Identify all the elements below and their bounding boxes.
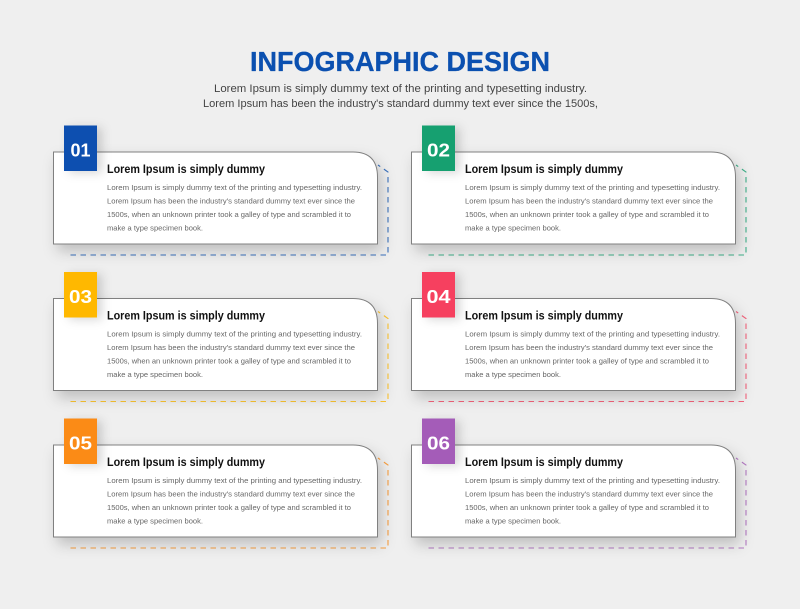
card text 03: make a type specimen book. xyxy=(107,370,203,379)
card text 01 xyxy=(107,183,362,232)
card text 03 xyxy=(107,330,362,379)
card heading 04: Lorem Ipsum is simply dummy xyxy=(465,310,624,322)
card text 05: 1500s, when an unknown printer took a galley of type and scrambled it to xyxy=(107,503,351,512)
card text 05 xyxy=(107,476,362,526)
card text 03: Lorem Ipsum is simply dummy text of the printing and typesetting industry. xyxy=(107,330,362,338)
card text 05: make a type specimen book. xyxy=(107,516,203,526)
card text 06: Lorem Ipsum has been the industry's standard dummy text ever since the xyxy=(465,490,713,498)
card text 05: Lorem Ipsum is simply dummy text of the printing and typesetting industry. xyxy=(107,476,362,485)
card text 02: Lorem Ipsum is simply dummy text of the printing and typesetting industry. xyxy=(465,183,720,192)
number badge 03: 03 xyxy=(69,286,92,307)
card heading 06: Lorem Ipsum is simply dummy xyxy=(465,457,624,469)
dashed outline 03 xyxy=(70,312,388,402)
number badge 03 xyxy=(64,272,97,318)
number badge 05: 05 xyxy=(69,432,92,454)
card text 02: Lorem Ipsum has been the industry's standard dummy text ever since the xyxy=(465,196,713,206)
panel: card 05 xyxy=(54,418,388,548)
card text 04: make a type specimen book. xyxy=(465,370,561,379)
number badge 02: 02 xyxy=(427,140,450,160)
number badge 01 xyxy=(64,126,97,171)
card text 05: Lorem Ipsum has been the industry's standard dummy text ever since the xyxy=(107,490,355,498)
card heading 02: Lorem Ipsum is simply dummy xyxy=(465,164,624,176)
card text 01: 1500s, when an unknown printer took a galley of type and scrambled it to xyxy=(107,210,351,219)
card text 04: Lorem Ipsum is simply dummy text of the printing and typesetting industry. xyxy=(465,330,720,338)
dashed outline 02 xyxy=(428,165,746,255)
card text 01: Lorem Ipsum is simply dummy text of the printing and typesetting industry. xyxy=(107,183,362,192)
number badge 04: 04 xyxy=(426,286,451,307)
card text 02: 1500s, when an unknown printer took a galley of type and scrambled it to xyxy=(465,210,709,219)
card body 02 xyxy=(412,152,736,244)
card text 06: Lorem Ipsum is simply dummy text of the printing and typesetting industry. xyxy=(465,476,720,485)
panel: card 01 xyxy=(54,126,388,255)
card text 06: make a type specimen book. xyxy=(465,516,561,526)
card heading 03: Lorem Ipsum is simply dummy xyxy=(107,310,266,322)
number badge 06 xyxy=(422,418,455,464)
card text 03: 1500s, when an unknown printer took a galley of type and scrambled it to xyxy=(107,356,351,366)
number badge 02 xyxy=(422,126,455,171)
dashed outline 04 xyxy=(428,312,746,402)
dashed outline 01 xyxy=(70,165,388,255)
card text 06: 1500s, when an unknown printer took a galley of type and scrambled it to xyxy=(465,503,709,512)
number badge 06: 06 xyxy=(427,432,450,454)
panel: card 06 xyxy=(412,418,746,548)
card text 02: make a type specimen book. xyxy=(465,224,561,232)
card text 01: make a type specimen book. xyxy=(107,224,203,232)
card text 04 xyxy=(465,330,720,379)
number badge 01: 01 xyxy=(70,140,90,160)
subtitle: Lorem Ipsum has been the industry's standard dummy text ever since the 1500s, xyxy=(203,98,598,110)
title: INFOGRAPHIC DESIGN xyxy=(250,46,550,77)
number badge 05 xyxy=(64,418,97,464)
card body 05 xyxy=(54,445,378,537)
card body 03 xyxy=(54,298,378,390)
panel: card 02 xyxy=(412,126,746,255)
subtitle: Lorem Ipsum is simply dummy text of the printing and typesetting industry. xyxy=(214,83,587,95)
number badge 04 xyxy=(422,272,455,318)
card text 02 xyxy=(465,183,720,232)
panel: card 03 xyxy=(54,272,388,402)
subtitle xyxy=(203,83,598,110)
panel: card 04 xyxy=(412,272,746,402)
card text 06 xyxy=(465,476,720,526)
dashed outline 06 xyxy=(428,458,746,548)
card body 04 xyxy=(412,298,736,390)
dashed outline 05 xyxy=(70,458,388,548)
card body 06 xyxy=(412,445,736,537)
card heading 01: Lorem Ipsum is simply dummy xyxy=(107,164,266,176)
card text 04: Lorem Ipsum has been the industry's standard dummy text ever since the xyxy=(465,343,713,352)
card text 04: 1500s, when an unknown printer took a galley of type and scrambled it to xyxy=(465,356,709,366)
card text 01: Lorem Ipsum has been the industry's standard dummy text ever since the xyxy=(107,196,355,206)
card heading 05: Lorem Ipsum is simply dummy xyxy=(107,457,266,469)
card body 01 xyxy=(54,152,378,244)
card text 03: Lorem Ipsum has been the industry's standard dummy text ever since the xyxy=(107,343,355,352)
